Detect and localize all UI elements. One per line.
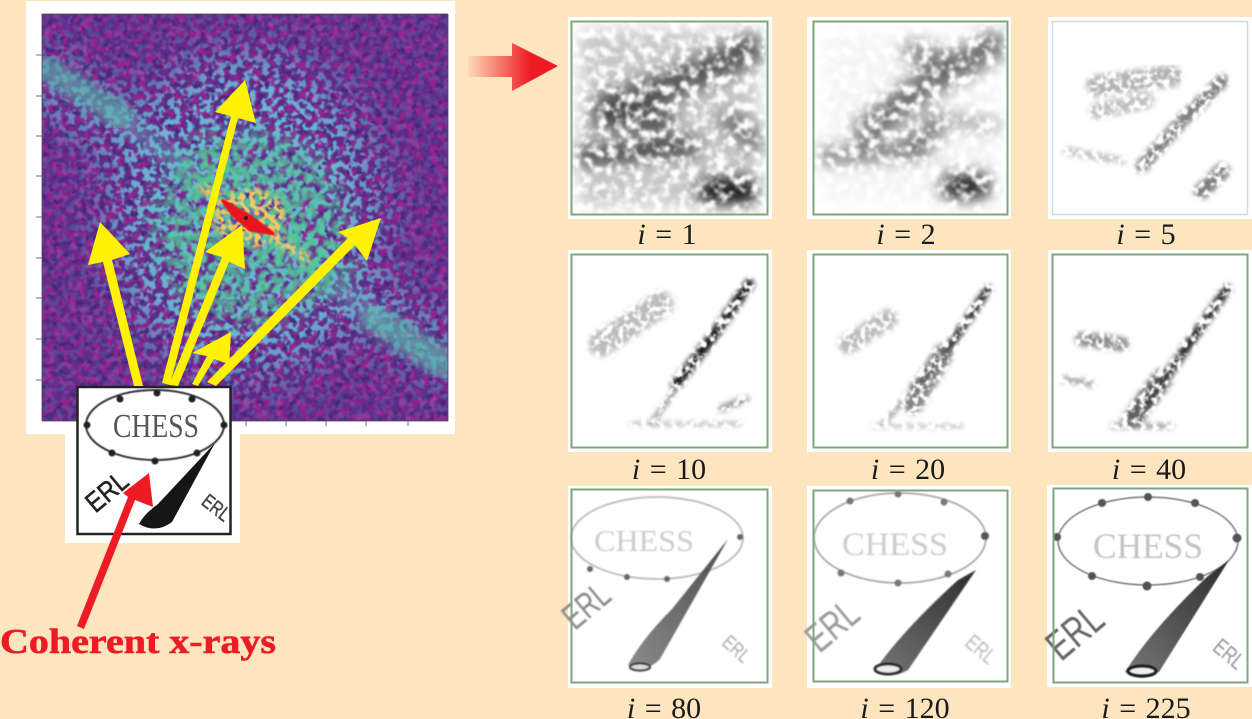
panel: i = 40 xyxy=(1048,250,1252,486)
arrow: short xyxy=(192,332,231,386)
panel: i = 5 xyxy=(1048,17,1252,251)
i=120 sketch xyxy=(797,490,1001,675)
i=225 border xyxy=(1054,488,1248,682)
i=2 frame xyxy=(807,17,1011,219)
i=5 border xyxy=(1052,22,1248,214)
ERL label small: ERL xyxy=(197,490,234,526)
i=20 label: i = 20 xyxy=(871,453,945,486)
i=225 frame xyxy=(1047,485,1252,687)
i=120 sketch: ERL xyxy=(961,629,1001,669)
panel: i = 225 xyxy=(1037,485,1252,719)
i=5 blotches xyxy=(1067,76,1222,191)
i=10 blotches xyxy=(601,284,749,424)
i=1 label: i = 1 xyxy=(637,218,697,251)
i=80 sketch: ERL xyxy=(718,631,755,668)
sketch black box xyxy=(78,387,230,534)
i=10 label: i = 10 xyxy=(632,453,706,486)
i=225 sketch: CHESS xyxy=(1093,526,1203,566)
i=80 border xyxy=(572,490,768,682)
i=2 border xyxy=(814,22,1008,214)
panel: i = 10 xyxy=(568,250,772,486)
i=120 sketch: CHESS xyxy=(842,527,948,563)
i=5 label: i = 5 xyxy=(1116,218,1176,251)
i=20 border xyxy=(814,254,1008,448)
panel: CHESS ERL source sketch xyxy=(65,387,240,543)
i=40 blotches xyxy=(1064,289,1227,426)
panel: coherence heat map xyxy=(26,1,456,434)
i=225 sketch: ERL xyxy=(1037,595,1113,669)
panel: i = 80 xyxy=(554,486,772,719)
red arrow: coherent x-rays input xyxy=(77,473,153,629)
yellow scattering arrows xyxy=(88,80,381,386)
i=1 blotches xyxy=(579,29,759,207)
i=40 frame xyxy=(1048,250,1252,452)
heat map white frame xyxy=(26,1,455,434)
i=120 sketch: ERL xyxy=(797,591,868,661)
i=225 sketch xyxy=(1037,493,1250,676)
panel: i = 2 xyxy=(807,17,1011,251)
i=10 frame xyxy=(568,250,772,452)
arrow: tall centre xyxy=(162,80,256,385)
i=40 border xyxy=(1052,254,1248,448)
x-ray beam cone xyxy=(139,443,215,529)
sketch white frame xyxy=(65,434,240,543)
i=1 frame xyxy=(568,17,772,219)
i=2 blotches xyxy=(823,31,998,203)
i=80 frame xyxy=(568,486,772,688)
arrow: to centre xyxy=(169,225,245,386)
ERL label large: ERL xyxy=(79,465,134,518)
i=120 border xyxy=(814,490,1008,682)
i=20 frame xyxy=(807,250,1011,452)
i=5 frame xyxy=(1048,17,1252,219)
panel: i = 1 xyxy=(568,17,772,251)
i=80 sketch: CHESS xyxy=(594,523,694,558)
storage ring ellipse xyxy=(84,390,228,464)
panel: i = 120 xyxy=(797,486,1011,719)
CHESS label: CHESS xyxy=(113,408,199,445)
caption: Coherent x-rays: Coherent x-rays xyxy=(0,622,276,661)
i=40 label: i = 40 xyxy=(1112,453,1186,486)
heat map speckle plot xyxy=(36,14,456,421)
heat map axis ticks xyxy=(36,14,448,426)
i=80 sketch: ERL xyxy=(554,574,618,637)
panel: i = 20 xyxy=(807,250,1011,486)
arrow: red gradient to panels xyxy=(468,43,558,91)
i=120 frame xyxy=(807,486,1011,688)
arrow: right xyxy=(207,218,381,386)
i=80 sketch xyxy=(554,497,755,670)
arrow: far left xyxy=(88,222,143,386)
i=2 label: i = 2 xyxy=(876,218,936,251)
i=20 blotches xyxy=(848,289,988,426)
i=10 border xyxy=(572,254,768,448)
i=1 border xyxy=(572,22,768,214)
